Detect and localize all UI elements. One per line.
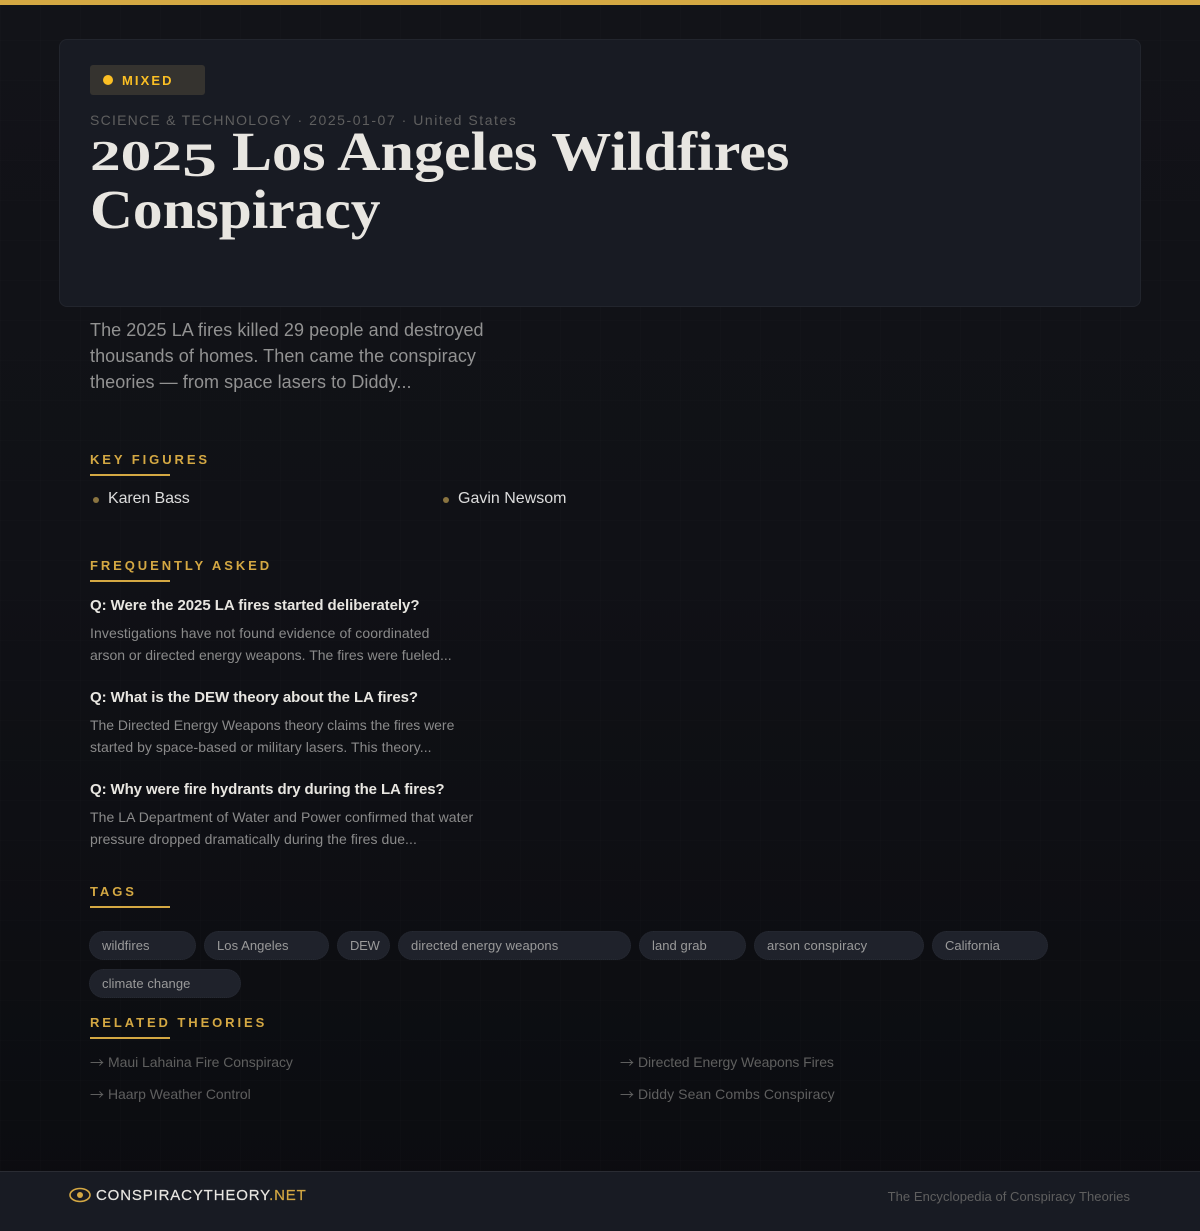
tag row 2: climate change	[102, 976, 190, 991]
FAQ answer 3: pressure dropped dramatically during the fires due...	[90, 831, 417, 847]
related link: Diddy: →	[620, 1085, 634, 1105]
FAQ answer 2	[90, 717, 454, 755]
title	[90, 121, 789, 240]
key figure: Karen Bass: Karen Bass	[108, 490, 190, 507]
tag row 1: Los Angeles	[217, 938, 289, 953]
panel: hero header	[59, 39, 1141, 307]
icon: eye logo	[69, 1188, 91, 1202]
related link: Directed Energy Weapons: Directed Energy Weapons Fires	[638, 1054, 834, 1070]
FAQ question 2: Q: What is the DEW theory about the LA fires?	[90, 689, 418, 706]
summary text: The 2025 LA fires killed 29 people and destroyed	[90, 320, 484, 340]
summary text	[90, 320, 484, 392]
tag row 1: California	[945, 938, 1000, 953]
tag row 1: land grab	[652, 938, 707, 953]
FAQ answer 2: started by space-based or military lasers. This theory...	[90, 739, 432, 755]
title: Los Angeles Wildfires	[232, 121, 789, 182]
key figure: Gavin Newsom: Gavin Newsom	[458, 490, 566, 507]
FAQ answer 1: Investigations have not found evidence of coordinated	[90, 625, 429, 641]
heading: tags: TAGS	[90, 884, 137, 899]
summary text: thousands of homes. Then came the conspiracy	[90, 346, 476, 366]
FAQ question 1: Q: Were the 2025 LA fires started deliberately?	[90, 597, 419, 614]
heading: related theories: RELATED THEORIES	[90, 1015, 267, 1030]
category, date and location line: SCIENCE & TECHNOLOGY · 2025-01-07 · United States	[90, 112, 517, 128]
FAQ answer 1: arson or directed energy weapons. The fires were fueled...	[90, 647, 452, 663]
related link: Haarp: Haarp Weather Control	[108, 1086, 251, 1102]
tag row 1: DEW	[350, 938, 379, 953]
badge dot	[103, 75, 113, 85]
heading: frequently asked: FREQUENTLY ASKED	[90, 558, 272, 573]
FAQ answer 3	[90, 809, 473, 847]
heading: key figures: KEY FIGURES	[90, 452, 210, 467]
badge label: MIXED	[122, 73, 174, 88]
related link: Haarp: →	[90, 1085, 104, 1105]
title: Conspiracy	[90, 179, 380, 240]
verdict badge: mixed	[90, 65, 205, 95]
tag row 1: arson conspiracy	[767, 938, 867, 953]
related link: Diddy: Diddy Sean Combs Conspiracy	[638, 1086, 835, 1102]
tag row 1: directed energy weapons	[411, 938, 558, 953]
footer tagline: The Encyclopedia of Conspiracy Theories	[888, 1189, 1130, 1204]
FAQ answer 1	[90, 625, 452, 663]
tag row 1	[89, 931, 1048, 960]
related link: Directed Energy Weapons: →	[620, 1053, 634, 1073]
summary text: theories — from space lasers to Diddy...	[90, 372, 412, 392]
related link: Maui Lahaina: Maui Lahaina Fire Conspiracy	[108, 1054, 293, 1070]
FAQ answer 3: The LA Department of Water and Power confirmed that water	[90, 809, 473, 825]
tag row 1: wildfires	[102, 938, 150, 953]
footer bar	[0, 1171, 1200, 1231]
title: 2025	[90, 134, 217, 187]
logo wordmark: CONSPIRACYTHEORY.NET	[96, 1187, 307, 1204]
FAQ question 3: Q: Why were fire hydrants dry during the LA fires?	[90, 781, 444, 798]
top accent bar	[0, 0, 1200, 5]
FAQ answer 2: The Directed Energy Weapons theory claims the fires were	[90, 717, 454, 733]
related link: Maui Lahaina: →	[90, 1053, 104, 1073]
